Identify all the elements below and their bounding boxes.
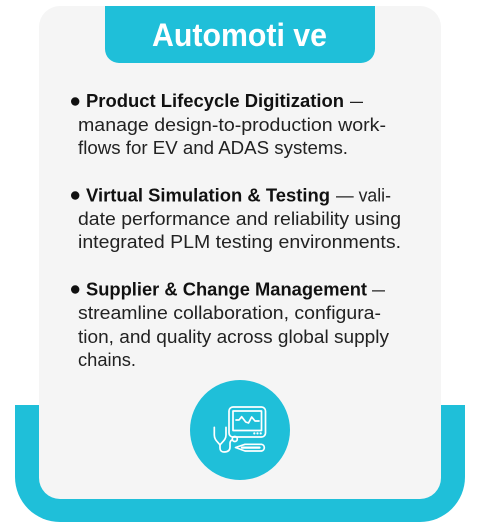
text block: virtual simulation and testing: date performance and reliability using [78, 209, 401, 229]
title: Automoti ve [152, 17, 327, 53]
text block: product lifecycle digitization: — [350, 91, 363, 111]
text block: product lifecycle digitization: manage design-to-production work- [78, 115, 386, 135]
text block: supplier and change management: — [372, 280, 385, 300]
text block: product lifecycle digitization: flows for EV and ADAS systems. [78, 138, 348, 158]
text block: supplier and change management [71, 280, 389, 370]
text block: virtual simulation and testing: integrated PLM testing environments. [78, 232, 401, 252]
panel: card [39, 6, 441, 499]
text block: supplier and change management: tion, and quality across global supply [78, 327, 389, 347]
icon: medical monitor with stethoscope and thermometer [190, 380, 290, 480]
text block: virtual simulation and testing [71, 186, 401, 252]
header tab [105, 6, 375, 63]
text block: virtual simulation and testing: Virtual Simulation & Testing [86, 186, 330, 206]
text block: supplier and change management: chains. [78, 350, 136, 370]
text block: supplier and change management: streamline collaboration, configura- [78, 303, 381, 323]
text block: supplier and change management: Supplier & Change Management [86, 280, 367, 300]
text block: virtual simulation and testing: — vali- [336, 186, 391, 206]
text block: product lifecycle digitization: Product Lifecycle Digitization [86, 91, 344, 111]
teal U-shaped frame [15, 405, 465, 522]
text block: product lifecycle digitization [71, 91, 386, 158]
